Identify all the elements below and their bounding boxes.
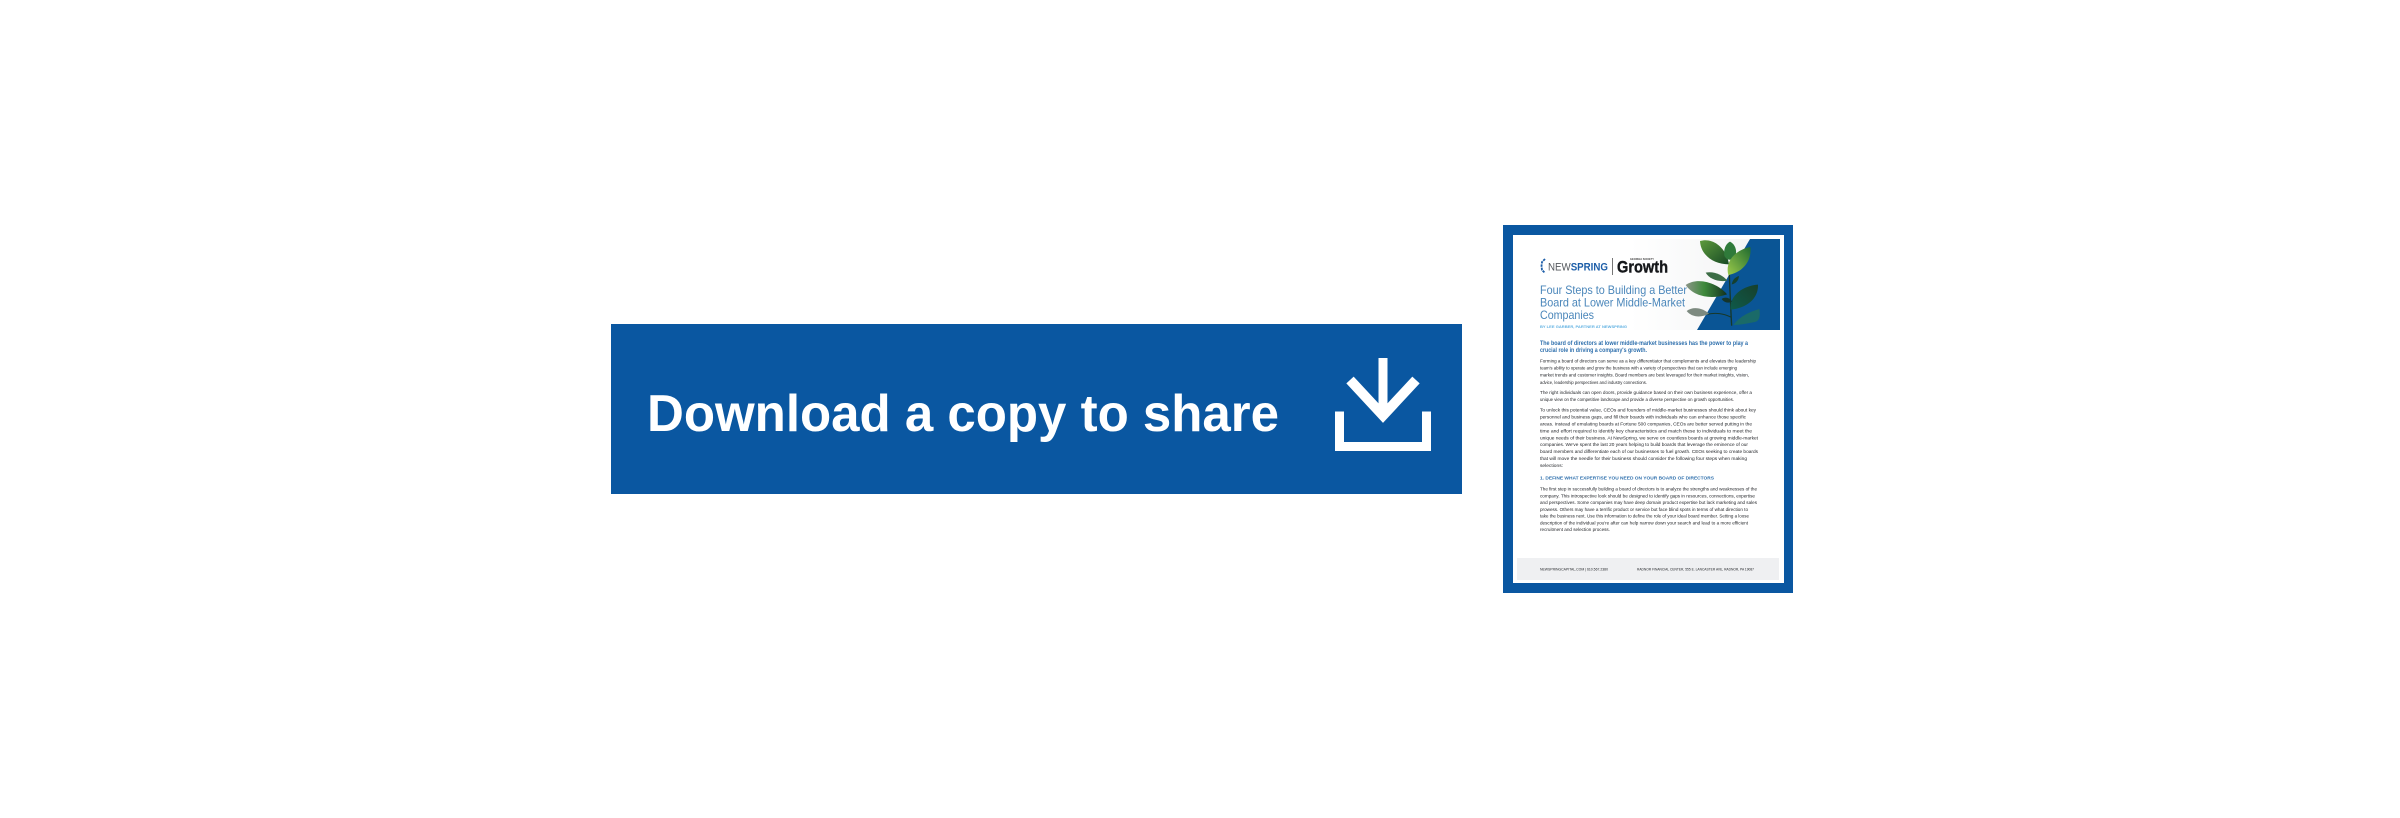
paragraph 2: The right individuals can open doors, provide guidance based on their own business experience, offer a	[1540, 390, 1752, 395]
document title	[1540, 283, 1687, 322]
intro statement: The board of directors at lower middle-market businesses has the power to play a	[1540, 341, 1749, 347]
blue diagonal panel	[1697, 239, 1780, 330]
button label: Download a copy to share	[647, 385, 1279, 443]
paragraph 3: areas. Instead of emulating boards at Fortune 500 companies, CEOs are better served putting in the	[1540, 422, 1752, 427]
logo: Growth: Growth	[1617, 258, 1668, 276]
logo: NewSpring: NEWSPRING	[1548, 262, 1608, 274]
paragraph 4: prowess. Others may have a terrific product or service but face blind spots in terms of what direction to	[1540, 507, 1748, 512]
footer contact: NEWSPRINGCAPITAL.COM | 610.567.2380	[1540, 568, 1608, 572]
logo: Growth: GEORGIA SOCIETY	[1630, 258, 1654, 261]
paragraph 3: selections:	[1540, 463, 1563, 468]
document title: Board at Lower Middle-Market	[1540, 296, 1686, 310]
section heading: 1. DEFINE WHAT EXPERTISE YOU NEED ON YOUR BOARD OF DIRECTORS	[1540, 476, 1715, 482]
footer address: RADNOR FINANCIAL CENTER, 555 E. LANCASTER AVE, RADNOR, PA 19087	[1637, 568, 1754, 572]
paragraph 3: that will move the needle for their business should consider the following four steps when making	[1540, 456, 1747, 461]
document thumbnail	[1503, 225, 1793, 593]
intro statement: crucial role in driving a company's growth.	[1540, 348, 1647, 354]
paragraph 3: unique needs of their business. At NewSpring, we serve on countless boards at growing middle-market	[1540, 435, 1759, 440]
paragraph 4: recruitment and selection process.	[1540, 527, 1610, 532]
document title: Companies	[1540, 308, 1594, 322]
paragraph 1	[1540, 358, 1756, 385]
paragraph 4: company. This introspective look should be designed to identify gaps in resources, connections, expertise	[1540, 493, 1755, 498]
paragraph 3	[1540, 408, 1759, 468]
icon: download arrow into tray	[1340, 358, 1426, 446]
plant leaves	[1686, 240, 1760, 326]
paragraph 4: and perspectives. Some companies may have deep domain product expertise but lack marketing and sales	[1540, 500, 1758, 505]
paragraph 1: Forming a board of directors can serve as a key differentiator that complements and elevates the leadership	[1540, 358, 1756, 364]
paragraph 1: market trends and customer insights. Board members are best leveraged for their market insights, vision,	[1540, 373, 1749, 378]
paragraph 2: unique view on the competitive landscape and provide a diverse perspective on growth opportunities.	[1540, 397, 1734, 402]
document title: Four Steps to Building a Better	[1540, 283, 1687, 297]
paragraph 3: time and effort required to identify key characteristics and match these to individuals to meet the	[1540, 428, 1752, 433]
paragraph 2	[1540, 390, 1752, 402]
paragraph 3: To unlock this potential value, CEOs and founders of middle-market businesses should think about key	[1540, 408, 1757, 413]
byline: BY LEE GARBER, PARTNER AT NEWSPRING	[1540, 325, 1627, 329]
download button	[611, 324, 1462, 494]
header image with plant	[1630, 239, 1780, 330]
paragraph 3: board members and differentiate each of our businesses to fuel growth. CEOs seeking to create boards	[1540, 449, 1759, 454]
paragraph 3: companies. We've spent the last 20 years helping to build boards that leverage the eminence of our	[1540, 442, 1748, 447]
logo divider	[1611, 258, 1614, 275]
paragraph 1: team's ability to operate and grow the business with a variety of perspectives that can include emerging	[1540, 366, 1737, 371]
document footer band	[1517, 558, 1779, 580]
paragraph 4	[1540, 486, 1758, 532]
intro statement	[1540, 341, 1749, 354]
document blue frame	[1503, 225, 1793, 593]
document page	[1513, 235, 1784, 583]
paragraph 3: personnel and business gaps, and fill their boards with individuals who can enhance those specific	[1540, 415, 1747, 420]
paragraph 4: description of the individual you're after can help narrow down your search and lead to a more efficient	[1540, 520, 1749, 526]
paragraph 4: take the business next. Use this information to define the role of your ideal board member. Setting a loose	[1540, 514, 1749, 519]
paragraph 4: The first step in successfully building a board of directors is to analyze the strengths and weaknesses of the	[1540, 486, 1757, 491]
paragraph 1: advice, leadership perspectives and industry connections.	[1540, 380, 1647, 385]
